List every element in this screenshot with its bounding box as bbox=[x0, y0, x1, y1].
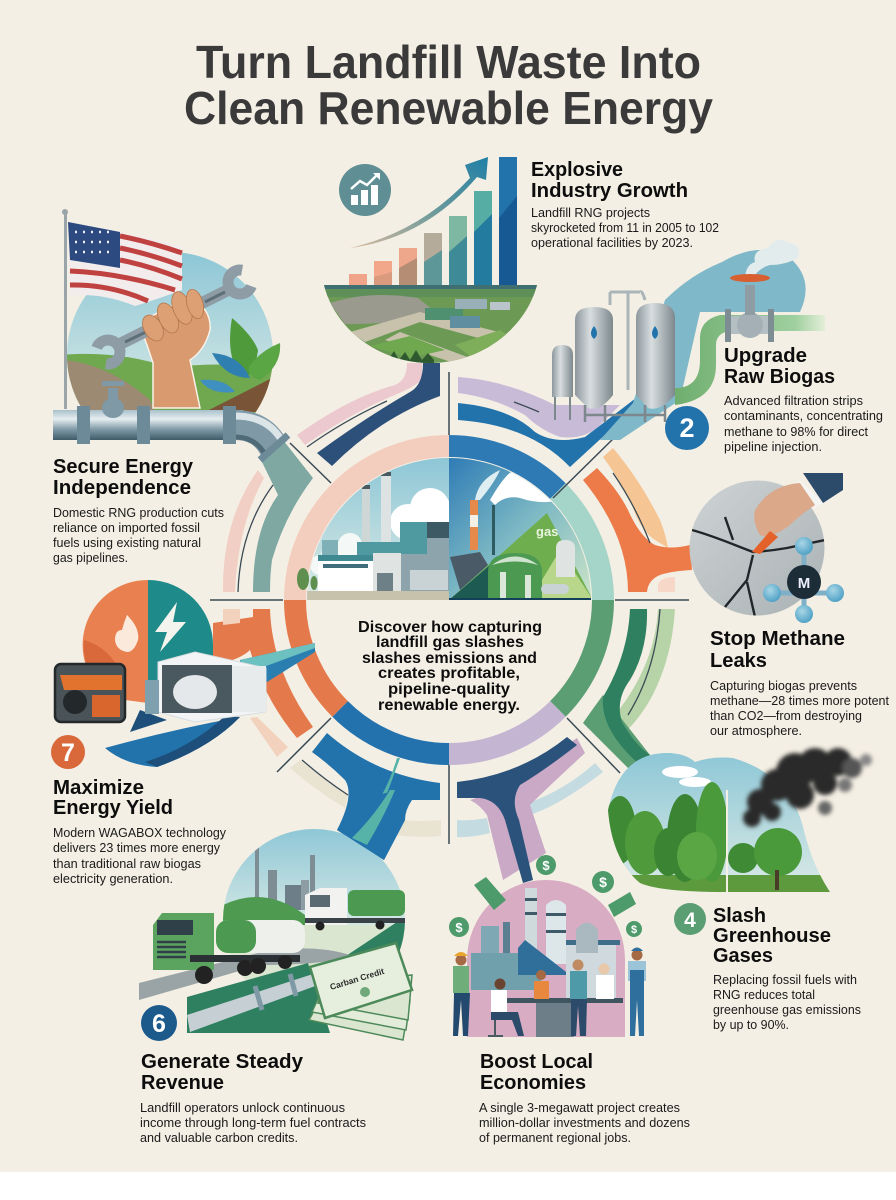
number badge 2: 2 bbox=[679, 413, 695, 443]
heading: Slash bbox=[713, 905, 766, 927]
heading: Leaks bbox=[710, 650, 767, 672]
icon: small trees by the plant bbox=[297, 568, 318, 590]
center illustration: renewable gas half bbox=[449, 455, 594, 601]
number badge 6 bbox=[141, 1005, 177, 1041]
inner ring bbox=[284, 435, 614, 765]
body text: Domestic RNG production cuts bbox=[53, 506, 224, 520]
center text: pipeline-quality bbox=[388, 681, 510, 698]
body text: contaminants, concentrating bbox=[724, 409, 883, 423]
tanks bbox=[552, 292, 675, 422]
illustration: landscape circle bbox=[60, 250, 280, 415]
heading: Industry Growth bbox=[531, 180, 688, 202]
number badge 2 bbox=[665, 406, 709, 450]
icons: money: $ bbox=[455, 920, 463, 935]
panel: explosive industry growth bbox=[320, 157, 719, 368]
heading: Raw Biogas bbox=[724, 366, 835, 388]
heading bbox=[713, 905, 831, 967]
illustration: workers bbox=[453, 948, 646, 1036]
center text: creates profitable, bbox=[378, 665, 520, 682]
heading: Stop Methane bbox=[710, 628, 845, 650]
band: south-east dark green bbox=[603, 609, 650, 765]
illustration: smoke bbox=[743, 748, 872, 827]
backdrop blob bbox=[600, 250, 806, 440]
heading bbox=[710, 628, 845, 672]
band: south-east medium green bbox=[583, 695, 650, 770]
swoosh shadow bbox=[130, 710, 240, 767]
band: south pink stem bbox=[470, 738, 585, 880]
body text: by up to 90%. bbox=[713, 1018, 789, 1032]
number badge 4: 4 bbox=[684, 909, 696, 932]
band: south navy bbox=[457, 737, 577, 883]
icon: valve bbox=[725, 274, 774, 342]
band: south-west beige bbox=[290, 760, 441, 837]
streak to ring bbox=[240, 643, 315, 690]
center text: renewable energy. bbox=[378, 697, 520, 714]
icon: methane molecule: M bbox=[798, 575, 810, 592]
icon: methane molecule bbox=[763, 537, 844, 623]
band: north-east lilac bbox=[458, 377, 620, 438]
pink dome bbox=[467, 880, 625, 1037]
band: south-east light green bbox=[615, 609, 675, 733]
body text: Replacing fossil fuels with bbox=[713, 973, 857, 987]
stem streak bbox=[352, 790, 395, 845]
icon: steam bbox=[745, 240, 799, 282]
body text: of permanent regional jobs. bbox=[479, 1131, 631, 1145]
body text: pipeline injection. bbox=[724, 440, 822, 454]
icon: flame and lightning disc bbox=[83, 580, 213, 703]
body text bbox=[53, 506, 224, 565]
band: east pale pink bbox=[658, 577, 675, 592]
band: west orange bbox=[213, 609, 313, 738]
number badge 7 bbox=[51, 735, 85, 769]
body text: greenhouse gas emissions bbox=[713, 1003, 861, 1017]
band: south-west teal streak bbox=[352, 758, 400, 845]
heading: Independence bbox=[53, 477, 191, 499]
streak highlight bbox=[240, 643, 315, 672]
band: east orange bbox=[583, 468, 692, 592]
body text: gas pipelines. bbox=[53, 551, 128, 565]
illustration: pipeline bbox=[187, 963, 330, 1033]
title: Clean Renewable Energy bbox=[184, 82, 713, 134]
band: south light blue bbox=[457, 763, 603, 837]
bar chart bbox=[349, 157, 517, 286]
center text bbox=[358, 619, 542, 714]
heading: Maximize bbox=[53, 777, 144, 799]
generator bbox=[55, 664, 125, 722]
body text: and valuable carbon credits. bbox=[140, 1131, 298, 1145]
body text: Landfill operators unlock continuous bbox=[140, 1101, 345, 1115]
body text bbox=[713, 973, 861, 1032]
body text: income through long-term fuel contracts bbox=[140, 1116, 366, 1130]
heading: Boost Local bbox=[480, 1051, 593, 1073]
illustration: trees and sky bbox=[600, 750, 832, 895]
heading bbox=[531, 159, 688, 202]
body text bbox=[479, 1101, 690, 1145]
number badge 7: 7 bbox=[61, 739, 75, 767]
landscape bowl bbox=[324, 285, 537, 363]
swoosh bbox=[105, 717, 240, 767]
icons: money: $ bbox=[599, 874, 607, 890]
icon: hand with sealant bbox=[752, 473, 843, 554]
body text: Landfill RNG projects bbox=[531, 206, 650, 220]
body text: our atmosphere. bbox=[710, 724, 802, 738]
illustration: road bbox=[139, 948, 350, 1000]
body text: million-dollar investments and dozens bbox=[479, 1116, 690, 1130]
panel: maximize energy yield bbox=[51, 580, 315, 886]
icon: flag bbox=[62, 209, 182, 409]
body text: fuels using existing natural bbox=[53, 536, 201, 550]
body text: than CO2—from destroying bbox=[710, 709, 862, 723]
illustration: factory bbox=[471, 888, 623, 1037]
heading bbox=[480, 1051, 593, 1094]
illustration: carbon credit certificates bbox=[309, 943, 412, 1040]
icons: money: $ bbox=[542, 858, 550, 873]
band: west teal bbox=[253, 440, 313, 592]
body text: Advanced filtration strips bbox=[724, 394, 863, 408]
body text: reliance on imported fossil bbox=[53, 521, 200, 535]
body text bbox=[53, 826, 227, 886]
body text: operational facilities by 2023. bbox=[531, 236, 693, 250]
body text bbox=[531, 206, 719, 250]
body text: A single 3-megawatt project creates bbox=[479, 1101, 680, 1115]
body text: Modern WAGABOX technology bbox=[53, 826, 227, 840]
panel: secure energy independence bbox=[53, 209, 288, 565]
title bbox=[184, 36, 713, 134]
band: north-west navy bbox=[317, 363, 440, 466]
body text bbox=[140, 1101, 366, 1145]
body text: than traditional raw biogas bbox=[53, 857, 201, 871]
icon: chart badge bbox=[339, 164, 391, 216]
center text: Discover how capturing bbox=[358, 619, 542, 636]
icon: fingers bbox=[138, 287, 207, 345]
heading: Economies bbox=[480, 1072, 586, 1094]
center text: landfill gas slashes bbox=[376, 634, 524, 651]
concrete circle with crack bbox=[690, 480, 824, 616]
heading: Upgrade bbox=[724, 345, 807, 367]
band: west pale peach bbox=[223, 609, 288, 757]
center text: slashes emissions and bbox=[362, 650, 537, 667]
container unit bbox=[145, 652, 266, 722]
body text: methane to 98% for direct bbox=[724, 425, 868, 439]
heading: Energy Yield bbox=[53, 797, 173, 819]
heading: Greenhouse bbox=[713, 925, 831, 947]
center illustration: fossil plant half bbox=[307, 458, 449, 600]
title: Turn Landfill Waste Into bbox=[196, 36, 701, 88]
outer ring bands bbox=[213, 363, 692, 883]
band: north-east blue bbox=[458, 395, 640, 467]
illustration: truck near bbox=[153, 913, 305, 984]
number badge 4 bbox=[674, 903, 706, 935]
number badge 6: 6 bbox=[152, 1010, 166, 1038]
band overlap: stem over dome bbox=[337, 790, 405, 860]
arrow: growth bbox=[350, 157, 488, 248]
heading bbox=[53, 456, 194, 499]
heading: Revenue bbox=[141, 1072, 224, 1094]
illustration: sky and refinery bbox=[223, 829, 405, 980]
body text: RNG reduces total bbox=[713, 988, 815, 1002]
band: east peach bbox=[603, 448, 668, 548]
body text: methane—28 times more potent bbox=[710, 694, 889, 708]
dividers bbox=[210, 372, 689, 844]
illustration: carbon credit certificates: Carban Credit bbox=[329, 966, 385, 992]
green pipe bbox=[675, 315, 825, 405]
band: south-west blue bbox=[312, 733, 440, 860]
panel: upgrade raw biogas bbox=[552, 240, 883, 454]
heading bbox=[724, 345, 835, 388]
body text: delivers 23 times more energy bbox=[53, 841, 221, 855]
body text: electricity generation. bbox=[53, 872, 173, 886]
icon: pipeline bbox=[53, 381, 288, 460]
label on gas hill: gas bbox=[536, 524, 558, 539]
panel: boost local economies bbox=[449, 855, 690, 1145]
icon: wrench bbox=[97, 270, 251, 364]
body text bbox=[710, 679, 889, 738]
body text: Capturing biogas prevents bbox=[710, 679, 857, 693]
heading bbox=[53, 777, 173, 819]
icon: forearm and palm bbox=[144, 296, 210, 408]
heading: Gases bbox=[713, 945, 773, 967]
heading: Secure Energy bbox=[53, 456, 194, 478]
body text: skyrocketed from 11 in 2005 to 102 bbox=[531, 221, 719, 235]
icon: leaves bbox=[200, 318, 280, 392]
panel: slash greenhouse gases bbox=[600, 748, 872, 1032]
heading: Explosive bbox=[531, 159, 623, 181]
heading bbox=[141, 1051, 304, 1094]
panel: generate steady revenue bbox=[139, 790, 413, 1145]
body text bbox=[724, 394, 883, 454]
icons: money: $ bbox=[631, 924, 637, 936]
thin accents bbox=[238, 401, 660, 795]
panel: stop methane leaks bbox=[685, 473, 889, 738]
illustration: truck far bbox=[305, 888, 405, 930]
heading: Generate Steady bbox=[141, 1051, 304, 1073]
band: west pink bbox=[223, 470, 264, 592]
band: north-west pink bbox=[297, 363, 422, 445]
icons: money bbox=[449, 855, 642, 937]
